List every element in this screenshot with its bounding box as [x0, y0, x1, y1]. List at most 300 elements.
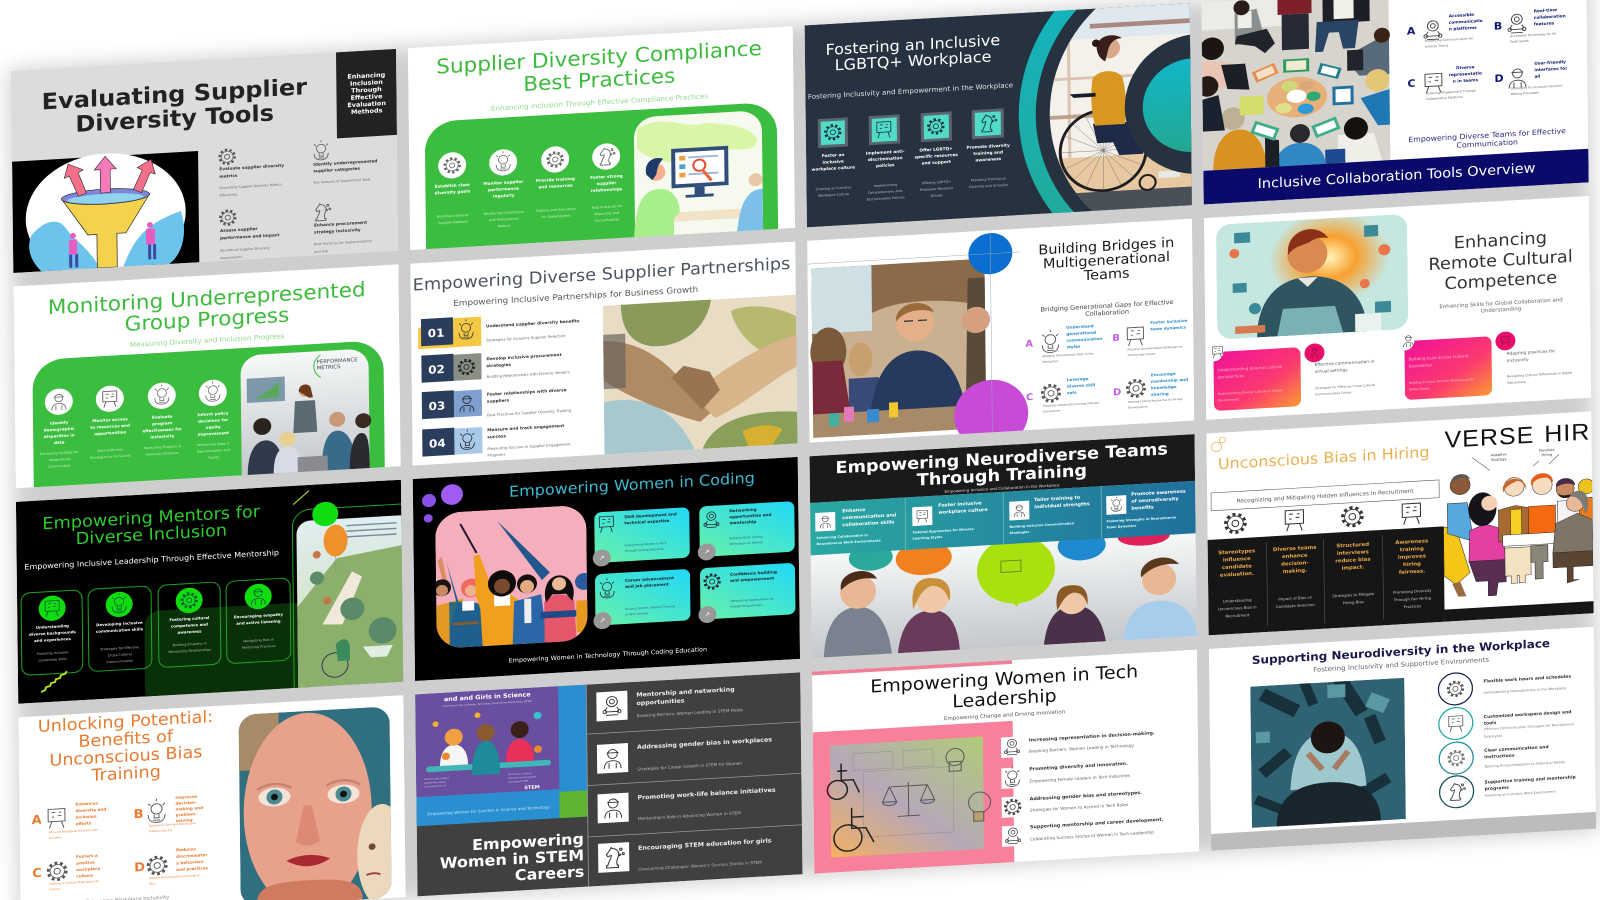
initiative: work-life: Promoting work-life balance initiatives	[637, 787, 776, 801]
row notes	[1029, 742, 1154, 842]
title: Empowering Mentors for	[42, 502, 260, 534]
decorative circles	[807, 228, 1029, 460]
tool C	[1408, 66, 1482, 100]
illustration: diverse hiring group: Panelists	[1539, 448, 1555, 453]
step 04: Measure and track engagement	[487, 423, 564, 432]
focus notes: Team Dynamics	[1107, 524, 1136, 529]
step labels: supplier	[597, 180, 617, 186]
benefit D: y behaviors	[176, 859, 204, 865]
metric notes: Data Collection	[97, 447, 123, 453]
card: confidence building	[698, 563, 796, 624]
green panel	[425, 102, 778, 249]
focus notes: Fostering Strengths in Neurodiverse	[1106, 516, 1176, 523]
tool D	[1494, 59, 1568, 97]
item B: Foster inclusive	[1150, 318, 1187, 325]
benefit D: discriminator	[176, 852, 208, 859]
item: assess performance: Benefits of Supplier Diversity	[220, 246, 270, 253]
illustration: man with laptop	[1216, 206, 1408, 340]
benefit B: solving	[176, 817, 193, 823]
slide: Building Bridges in Multigenerational Teams	[807, 219, 1195, 460]
card: confidence building: and empowerment	[730, 576, 774, 583]
metric labels: program	[152, 420, 172, 426]
step 03	[422, 383, 571, 421]
card: confidence building: Female Programmers	[730, 603, 763, 609]
slide: Evaluating Supplier Diversity Tools	[11, 49, 398, 282]
item B: Effective Communication Strategies for	[1127, 344, 1182, 352]
accent zigzags	[39, 491, 311, 692]
card: career advancement: in Tech Careers	[625, 611, 649, 617]
item: assess performance: Assess supplier	[220, 226, 258, 233]
card: confidence building: ↗	[705, 611, 710, 619]
benefit B: Experience Decision-Making and	[149, 821, 196, 828]
item D: D	[1113, 387, 1121, 398]
findings: improves	[1398, 554, 1426, 561]
findings: candidate	[1222, 563, 1252, 571]
findings: Diverse teams	[1273, 545, 1317, 553]
tool C: Fostering Engagement Through	[1426, 89, 1476, 95]
mentor notes: Cross-Cultural	[108, 652, 132, 658]
action notes: Providing Training on	[971, 176, 1006, 182]
slide: Inclusive Collaboration Tools Overview	[1195, 0, 1589, 205]
item D: knowledge	[1151, 384, 1177, 390]
man in blue	[1447, 475, 1474, 543]
action notes: Employee Resource	[920, 186, 953, 192]
item C	[1026, 375, 1099, 414]
center table	[1267, 75, 1327, 119]
support item 2: Employees	[1484, 734, 1503, 739]
subtitle: Fostering Inclusivity and Empowerment in the Workplace	[808, 82, 1013, 101]
item: underrepresented categories: Identify underrepresented	[313, 158, 377, 167]
photo: office presentation: PERFORMANCE	[317, 357, 358, 365]
card: networking: Workshops for Women	[730, 540, 763, 546]
benefit C: Creating a Positive Organizational	[49, 879, 98, 886]
benefit C: Culture	[49, 887, 60, 891]
focus notes: Enhancing Collaboration in	[816, 533, 868, 540]
poster: women and girls in science: Women's Day is about	[424, 777, 449, 781]
row labels: Supporting mentorship and career development.	[1030, 817, 1164, 830]
slide: Unconscious Bias in Hiring	[1206, 409, 1600, 635]
focus labels: Promote awareness	[1131, 490, 1186, 498]
benefit D: D	[134, 859, 145, 874]
item A: generational	[1066, 330, 1097, 336]
benefit A: Enhance Workplace Diversity and	[49, 828, 97, 834]
theme icons	[1226, 503, 1421, 535]
item B: B	[1112, 333, 1120, 344]
finding notes: Hiring Bias	[1343, 600, 1364, 605]
step notes: Monitoring Compliance	[484, 210, 524, 216]
subtitle: Communication	[1456, 138, 1518, 150]
logo rings	[1211, 437, 1226, 452]
metric notes: Measuring Progress in	[144, 444, 181, 450]
item: procurement strategy: and Use	[314, 249, 328, 254]
item B: Diverse Age Groups	[1128, 352, 1156, 357]
findings: evaluation.	[1220, 571, 1254, 579]
item: underrepresented categories	[313, 137, 378, 185]
finding notes: Recruitment	[1225, 613, 1250, 619]
woman 5	[540, 574, 577, 643]
item 2: virtual settings	[1315, 367, 1348, 375]
pink card 1	[1212, 342, 1301, 411]
left seated people	[1202, 38, 1250, 132]
step 02: Develop inclusive procurement	[486, 352, 562, 361]
tool C: Diverse	[1456, 64, 1475, 70]
metric notes: Diversity Initiatives	[146, 451, 179, 457]
bottom-right woman	[1325, 116, 1382, 164]
support item 3: Clear communication and	[1484, 745, 1549, 754]
item: procurement strategy: Best Practices for Implementation	[314, 239, 372, 246]
item 4: inclusivity	[1507, 357, 1529, 364]
bottom-left woman	[1213, 105, 1279, 170]
illustration: hillside and balloon	[292, 497, 403, 688]
support item 1: Understanding Neurodiversity in the Workplace	[1483, 686, 1566, 695]
findings: making.	[1283, 568, 1307, 575]
step labels: Establish clear	[435, 182, 470, 189]
action notes: Creating an Inclusive	[816, 185, 851, 191]
photo: office presentation	[240, 348, 372, 475]
pink card 3: Building Inclusive Remote Workspaces for	[1409, 377, 1474, 385]
item B	[1112, 318, 1188, 358]
findings	[1218, 538, 1429, 586]
tool D: Making Processes	[1511, 91, 1539, 96]
tool C: Collaborative Platforms	[1426, 95, 1463, 101]
benefit D: Reduces	[176, 846, 196, 852]
step labels: regularly	[493, 193, 515, 199]
tool B: collaboration	[1534, 13, 1566, 20]
woman 4	[512, 573, 548, 645]
step 04: 04	[429, 436, 446, 451]
tool C: n in teams	[1453, 77, 1479, 84]
illustration: diverse hiring group	[1442, 416, 1600, 598]
step 02: strategies	[486, 362, 512, 368]
mentor notes: Mentorship Relationships	[168, 648, 211, 654]
item A: communication	[1066, 336, 1103, 343]
tool B	[1494, 8, 1566, 43]
focus notes: Strategies	[1010, 530, 1029, 535]
row notes: Empowering Female Leaders in Tech Industries	[1029, 773, 1130, 784]
metric labels: Evaluate	[152, 414, 172, 420]
item 4	[1495, 328, 1572, 386]
title: Diversity Tools	[75, 100, 274, 138]
finding notes: Unconscious Bias in	[1218, 605, 1257, 611]
initiative: gender bias	[597, 735, 773, 774]
tool A: Diverse Teams	[1425, 43, 1449, 49]
item: assess performance: Assessments	[220, 255, 243, 260]
icon boxes	[818, 108, 1004, 148]
dividers	[586, 672, 803, 887]
step 01: 01	[428, 326, 444, 340]
photo: team with speech bubbles	[811, 524, 1198, 658]
poster: women and girls in science: STEM	[524, 784, 540, 791]
focus labels: individual strengths	[1034, 501, 1090, 510]
focus labels	[842, 489, 1186, 528]
benefit B: Problem-Solving	[149, 828, 172, 833]
slide: Empowering Women in Coding	[413, 457, 800, 681]
subtitle: Measuring Diversity and Inclusion Progress	[130, 332, 285, 349]
tool A	[1407, 12, 1483, 50]
finding notes: Through Fair Hiring	[1393, 596, 1432, 602]
finding notes: Understanding	[1223, 598, 1252, 604]
benefit B: decision-	[175, 800, 197, 806]
benefit C: C	[32, 865, 42, 880]
benefit B	[133, 794, 203, 834]
benefit D	[134, 846, 209, 887]
step notes: Reporting and	[594, 211, 619, 216]
metric notes: Equity	[208, 455, 219, 460]
photo: handshake on map	[603, 295, 798, 455]
metric labels: demographic	[44, 426, 75, 433]
initiative: gender bias: Strategies for Career Growth in STEM for Women	[637, 761, 743, 772]
item A: Understand	[1066, 323, 1094, 330]
mentor notes: Strategies for Effective	[100, 645, 139, 651]
row labels: Promoting diversity and innovation.	[1029, 761, 1128, 772]
teal band	[810, 481, 1196, 555]
title: Competence	[1444, 268, 1557, 294]
step labels: relationships	[591, 186, 623, 193]
step 01	[418, 310, 580, 349]
item C: sets	[1067, 390, 1077, 395]
action labels: and support	[922, 159, 951, 166]
dark green backdrop	[144, 602, 315, 705]
action notes: Implementing	[874, 183, 897, 188]
finding notes: Candidate Selection	[1276, 603, 1316, 609]
findings: reduce bias	[1335, 557, 1371, 565]
title banner: Inclusive Collaboration Tools Overview	[1258, 161, 1536, 192]
focus labels: communication and	[842, 512, 896, 521]
accent strip	[812, 660, 1012, 675]
item: evaluate metrics: metrics	[219, 173, 238, 179]
benefit C: workplace	[76, 866, 101, 872]
title: Evaluating Supplier	[42, 74, 307, 115]
support item 2: tools	[1484, 720, 1497, 727]
floor cards	[1239, 56, 1354, 143]
action labels: Implement anti-	[866, 149, 905, 156]
action labels: training and	[973, 150, 1003, 156]
findings: enhance	[1282, 553, 1308, 560]
step notes: Supplier Network	[438, 220, 468, 225]
findings: Structured	[1336, 542, 1369, 549]
card: confidence building: Confidence building	[730, 569, 777, 577]
metric labels: improvement	[198, 430, 229, 437]
focus notes: Building Inclusive Communication	[1009, 521, 1074, 529]
title banner	[1203, 149, 1589, 205]
item A: Workplace	[1043, 359, 1058, 364]
finding notes: Strategies to Mitigate	[1332, 592, 1374, 598]
title: Training	[90, 762, 161, 786]
mentor cards	[21, 578, 291, 676]
row labels: Addressing gender bias and stereotypes.	[1030, 790, 1142, 802]
subtitle: Bridging Generational Gaps for Effective	[1040, 298, 1174, 314]
item 2	[1304, 340, 1375, 397]
benefit C: positive	[76, 860, 95, 866]
step 03: 03	[428, 399, 445, 413]
step 03: Best Practices for Supplier Diversity Training	[487, 409, 571, 417]
step 02: 02	[428, 362, 445, 377]
item 4: Adapting practices for	[1507, 349, 1555, 357]
focus labels: Tailor training to	[1034, 496, 1080, 503]
row notes: Strategies for Women to Ascend in Tech Roles	[1030, 802, 1128, 813]
card: networking	[697, 501, 795, 561]
metric notes: Representation and	[197, 448, 230, 454]
card: skill development: technical expertise	[624, 518, 670, 525]
step labels: performance	[488, 186, 519, 192]
focus labels: Enhance	[842, 508, 866, 514]
card: networking: mentorship	[729, 519, 757, 525]
step labels: Monitor supplier	[483, 179, 523, 186]
slide: Empowering Neurodiverse Teams Through Training	[810, 434, 1198, 658]
finding notes: Promoting Diversity	[1393, 589, 1431, 595]
mentor labels	[29, 611, 284, 643]
pink card 3: boundaries	[1409, 362, 1432, 369]
illustration: diverse hiring group: Adaptive	[1491, 453, 1507, 457]
title: Supplier Diversity Compliance	[436, 37, 762, 79]
pink card 3: Global Teams	[1409, 386, 1430, 391]
sidebar callout: Methods	[351, 107, 383, 116]
row labels	[1029, 730, 1164, 830]
support item 2: Effective Communication Strategies for Neurodiverse	[1484, 722, 1574, 731]
poster: women and girls in science: All Futures in Science	[508, 772, 532, 776]
tool A: Accessible	[1449, 12, 1474, 18]
subtitle: Empowering Inclusive Leadership Through Effective Mentorship	[24, 548, 279, 572]
metric labels: inclusivity	[150, 433, 175, 440]
step 01: Strategies for Inclusive Supplier Selection	[486, 334, 566, 343]
support item 3: Tailoring Accommodations to Individual Needs	[1483, 760, 1565, 769]
focus icons	[815, 495, 1126, 532]
mentor notes: Mentoring Practices	[242, 644, 276, 650]
support item 3	[1439, 736, 1565, 775]
benefit B: B	[133, 806, 144, 821]
title: Remote Cultural	[1428, 247, 1573, 275]
card: confidence building: Networking Opportunities for	[730, 597, 774, 603]
subtitle: Empowering Inclusion and Collaboration in the Workplace	[944, 482, 1060, 494]
poster: women and girls in science: opportunity, access	[424, 781, 446, 785]
illustration: diverse hiring group: Strategy	[1491, 457, 1507, 462]
title: Women in STEM	[440, 847, 584, 872]
man in orange	[1528, 475, 1556, 580]
tool C: C	[1407, 77, 1416, 90]
tool D: interfaces for	[1534, 66, 1568, 72]
poster: women and girls in science: and support STEM	[508, 780, 528, 784]
item A	[1025, 323, 1103, 365]
focus notes: Tailored Approaches for Diverse	[912, 527, 974, 535]
card: skill development: Through Coding Education	[624, 547, 664, 553]
far-left yellow figure	[1444, 526, 1470, 585]
title: Teams	[1083, 266, 1130, 284]
mentor labels: Developing inclusive	[96, 620, 143, 627]
item A: Bridging Generational Gaps in the	[1043, 351, 1093, 358]
item 4: Interactions	[1507, 380, 1526, 385]
pink card 3: Building trust across cultural	[1409, 353, 1469, 362]
metric labels: effectiveness for	[142, 426, 182, 433]
card: career advancement: ↗	[600, 617, 605, 625]
poster: women and girls in science: and inclusion for all	[424, 784, 446, 788]
mentor notes	[37, 637, 276, 668]
support item 4: programs	[1485, 785, 1509, 792]
photo: team in circle	[1195, 0, 1391, 173]
subtitle: Enhancing Inclusion Through Effective Compliance Practices	[491, 92, 708, 113]
row labels: Increasing representation in decision-making.	[1029, 730, 1155, 743]
title: Multigenerational	[1043, 250, 1170, 272]
tool A: n platforms	[1449, 25, 1477, 31]
illustration: funnel	[12, 148, 199, 282]
step 02	[421, 347, 570, 383]
metric notes	[40, 441, 230, 469]
tool D: D	[1494, 72, 1504, 85]
mentor labels: Understanding	[36, 623, 69, 630]
row icons	[1001, 736, 1026, 847]
woman 1	[433, 578, 464, 649]
item: underrepresented categories: Key Features of Assessment Tools	[313, 177, 371, 185]
item: procurement strategy: strategy inclusivity	[314, 227, 361, 235]
tool B: Real-time	[1534, 7, 1557, 13]
subtitle: Fostering Inclusivity and Supportive Environments	[1313, 656, 1490, 674]
action labels: specific resources	[914, 152, 958, 159]
item: assess performance: performance and impact	[220, 232, 279, 241]
sidebar callout: Enhancing	[347, 72, 385, 81]
tool C: representatio	[1449, 71, 1482, 77]
finding notes: Practices	[1404, 604, 1421, 609]
action notes: Discrimination Policies	[867, 195, 905, 201]
card: skill development	[592, 507, 690, 567]
metric labels: opportunities	[94, 429, 127, 436]
action notes	[816, 178, 1008, 200]
mentor labels: communication skills	[96, 626, 144, 634]
sidebar callout: Effective	[351, 93, 383, 102]
slide: Supporting Neurodiversity in the Workplace	[1209, 627, 1596, 851]
woman with dark curly hair	[1469, 523, 1506, 597]
card: skill development: Skill development and	[624, 511, 677, 519]
metric labels: data	[54, 440, 65, 445]
poster: women and girls in science: Everyone can be inspired	[508, 775, 537, 780]
title: LGBTQ+ Workplace	[835, 48, 992, 74]
initiative: stem education	[598, 834, 772, 874]
tool D: Strategies for Inclusive Decision-	[1511, 84, 1563, 91]
subtitle: Collaboration	[1085, 308, 1129, 318]
title: Through Training	[917, 461, 1087, 490]
poster: women and girls in science: International Day of Women, Technology, Engineering Mathematics (STEM)	[443, 700, 532, 708]
title: Empowering Women in Tech	[870, 662, 1138, 697]
step labels: and resources	[538, 183, 573, 189]
item: evaluate metrics: Effectively	[220, 193, 237, 198]
mentor labels: competence and	[171, 622, 208, 629]
support item 1	[1438, 666, 1572, 706]
item D	[1113, 370, 1189, 410]
title: Careers	[515, 863, 584, 884]
mentor icons	[39, 583, 272, 622]
findings: fairness.	[1399, 569, 1425, 576]
step labels: diversity goals	[435, 189, 471, 195]
metric labels: Inform policy	[198, 411, 229, 417]
focus labels: workplace culture	[938, 507, 988, 516]
title: Fostering an Inclusive	[825, 31, 1000, 59]
step labels: Provide training	[536, 176, 575, 183]
item 2: Communication Online	[1315, 390, 1352, 396]
photo: team at table	[809, 258, 991, 438]
item 2: Strategies for Effective Cross-Cultural	[1315, 383, 1375, 390]
step 01: Understand supplier diversity benefits	[486, 318, 580, 329]
card: career advancement: Success Stories: Women Thriving	[625, 604, 675, 611]
seated woman in cardigan	[1552, 494, 1593, 584]
title: Building Bridges in	[1038, 235, 1174, 258]
pink card 1: Environments	[1218, 397, 1240, 402]
woman 2	[447, 561, 486, 648]
step notes	[437, 204, 622, 228]
tool A: Enhancing Communication for	[1425, 36, 1473, 43]
focus notes	[816, 515, 1177, 546]
bubbles	[422, 484, 463, 523]
illustration: diverse hiring group: Hiring	[1541, 453, 1552, 457]
row notes: Celebrating Success Stories of Women in Tech Leadership	[1030, 830, 1154, 842]
photo: stressed worker	[1250, 671, 1406, 828]
